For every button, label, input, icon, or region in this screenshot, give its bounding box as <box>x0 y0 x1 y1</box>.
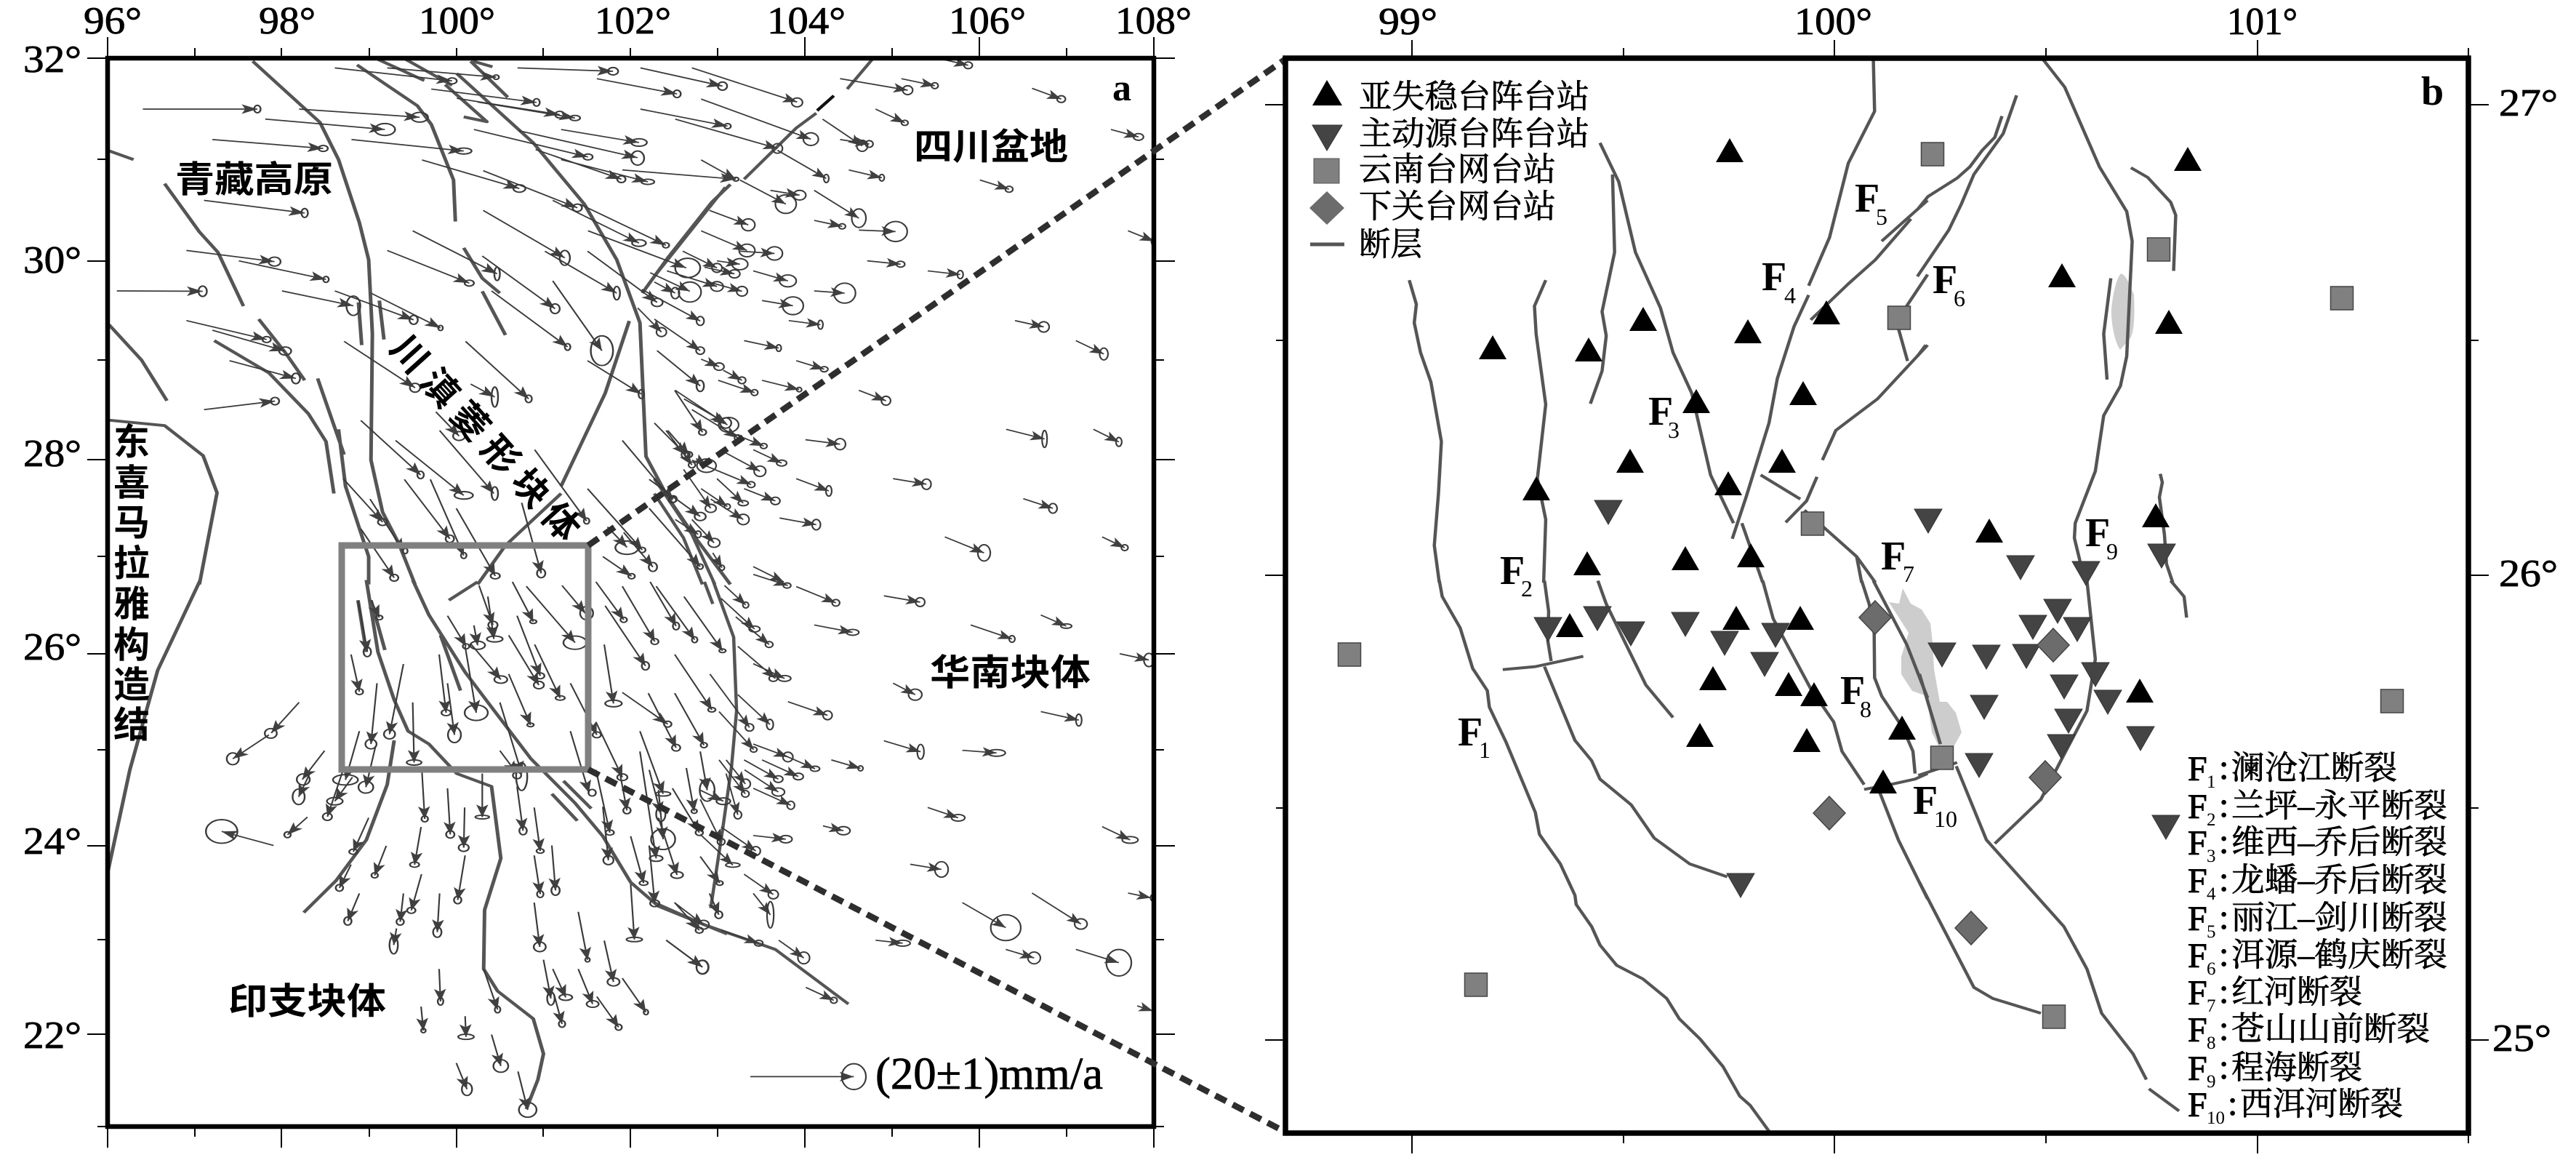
region label: Eastern Himalayan syntaxis (vertical): 造 <box>113 665 150 705</box>
Xiaguan network stations: grey diamonds <box>1813 601 2069 945</box>
region label: Indochina block: 印支块体 <box>228 981 386 1022</box>
faults north-west of panel b <box>1409 60 1927 583</box>
F5: 5 <box>2207 922 2216 942</box>
fault name labels F1 to F10 on the map: F <box>2085 511 2110 556</box>
fault name labels F1 to F10 on the map: 6 <box>1954 285 1965 311</box>
latitude labels of map b: 26° <box>2499 553 2558 595</box>
fault name labels F1 to F10 on the map: F <box>1762 255 1786 300</box>
longitude labels of map a: 98° <box>259 0 316 42</box>
region label: Sichuan Basin: 四川盆地 <box>914 127 1068 167</box>
velocity vectors north-west <box>117 68 739 581</box>
F10 <box>2188 1084 2403 1128</box>
longitude labels of map a: 106° <box>949 0 1026 42</box>
study-area box <box>342 545 588 769</box>
latitude labels of map a: 28° <box>23 433 81 475</box>
longitude labels of map a <box>84 0 1192 42</box>
longitude labels of map a: 100° <box>419 0 495 42</box>
panel b: station map <box>1265 1 2558 1153</box>
fault name labels F1 to F10 on the map: F <box>1855 176 1879 221</box>
F10: 西洱河断裂 <box>2240 1086 2403 1122</box>
fault name labels F1 to F10 on the map: 1 <box>1479 737 1490 763</box>
region label: Eastern Himalayan syntaxis (vertical): 拉 <box>113 543 150 584</box>
longitude labels of map a: 102° <box>595 0 671 42</box>
fault name labels F1 to F10 on the map: 2 <box>1521 575 1533 601</box>
fault name labels F1 to F10 on the map: F <box>1500 548 1525 593</box>
F1 <box>2188 748 2397 792</box>
F10: : <box>2228 1084 2237 1123</box>
fault name labels F1 to F10 on the map: F <box>1881 534 1906 579</box>
faults north-east of panel b <box>1917 60 2175 583</box>
F7: 7 <box>2207 996 2216 1016</box>
F10: F <box>2188 1086 2207 1124</box>
region label: Tibetan Plateau: 青藏高原 <box>175 159 333 200</box>
F6: : <box>2219 935 2228 974</box>
F9: : <box>2219 1048 2228 1087</box>
legend text: 亚失稳台阵台站 <box>1359 79 1589 115</box>
fault name labels F1 to F10 on the map: 7 <box>1903 561 1914 587</box>
fault name labels F1 to F10 on the map: 5 <box>1876 204 1887 230</box>
F7: F <box>2188 974 2207 1012</box>
legend symbol: Yunnan network station <box>1314 159 1339 183</box>
latitude labels of map a: 24° <box>23 820 81 863</box>
faults south-west <box>108 580 727 1109</box>
array stations: upward black triangles <box>1479 138 2202 793</box>
F1: F <box>2188 750 2207 788</box>
Yunnan network stations: grey squares <box>1338 143 2404 1028</box>
F5: : <box>2219 898 2228 937</box>
scale vector: 20 mm/a <box>750 1064 866 1089</box>
F1: 澜沧江断裂 <box>2231 750 2397 786</box>
F4 <box>2188 860 2447 904</box>
region label: Eastern Himalayan syntaxis (vertical): 结 <box>113 705 150 745</box>
F6: 6 <box>2207 959 2216 979</box>
region label: Eastern Himalayan syntaxis (vertical) <box>113 422 150 745</box>
F3: 维西–乔后断裂 <box>2231 824 2447 860</box>
F4: 龙蟠–乔后断裂 <box>2231 862 2447 898</box>
F7 <box>2188 972 2362 1016</box>
faults north-east <box>654 60 872 585</box>
panel a: GPS velocity map <box>23 0 1192 1148</box>
longitude labels of map a: 104° <box>767 0 846 42</box>
F5: F <box>2188 900 2207 938</box>
legend text: 云南台网台站 <box>1359 151 1556 188</box>
faults and velocity vectors, panel a <box>108 60 1157 1117</box>
F3: F <box>2188 824 2207 863</box>
latitude labels of map a: 32° <box>23 39 81 81</box>
F8: : <box>2219 1009 2228 1048</box>
fault name labels F1 to F10 on the map: F <box>1648 389 1673 434</box>
longitude labels of map b <box>1379 1 2298 43</box>
longitude labels of map b: 101° <box>2227 1 2298 43</box>
fault name key <box>2188 748 2447 1128</box>
legend symbol: array station <box>1312 80 1342 105</box>
region label: Eastern Himalayan syntaxis (vertical): 构 <box>113 625 150 665</box>
F8: 苍山山前断裂 <box>2231 1011 2430 1047</box>
latitude labels of map a <box>23 39 81 1057</box>
velocity vectors south-east <box>666 575 1157 1011</box>
fault name labels F1 to F10 on the map: 10 <box>1934 806 1957 832</box>
longitude labels of map b: 100° <box>1794 1 1872 43</box>
axis ticks of map b <box>1265 40 2489 1153</box>
fault name labels F1 to F10 on the map <box>1458 176 2118 832</box>
scale label: (20±1)mm/a <box>875 1049 1103 1099</box>
F2: 兰坪–永平断裂 <box>2231 788 2447 824</box>
F4: 4 <box>2207 884 2216 904</box>
F6: 洱源–鹤庆断裂 <box>2231 937 2447 973</box>
F2: F <box>2188 788 2207 826</box>
fault name labels F1 to F10 on the map: 3 <box>1668 417 1680 443</box>
F5 <box>2188 898 2447 942</box>
legend symbol: active-source station <box>1312 125 1342 151</box>
longitude labels of map b: 99° <box>1379 1 1437 43</box>
fault name labels F1 to F10 on the map: 8 <box>1860 696 1871 722</box>
dashed connector lines from box to panel b <box>588 60 1285 1132</box>
F7: : <box>2219 972 2228 1011</box>
faults south-west of panel b <box>1440 580 1927 1131</box>
F10: 10 <box>2207 1108 2225 1128</box>
panel letter a: a <box>1112 68 1131 109</box>
faults south-east of panel b <box>1918 580 2186 1111</box>
F4: F <box>2188 862 2207 900</box>
frame of map a <box>108 58 1154 1127</box>
fault name labels F1 to F10 on the map: F <box>1840 668 1865 713</box>
fault name labels F1 to F10 on the map: F <box>1933 257 1957 303</box>
F7: 红河断裂 <box>2231 974 2362 1010</box>
F8: 8 <box>2207 1033 2216 1053</box>
latitude labels of map b: 27° <box>2499 82 2558 124</box>
F1: 1 <box>2207 772 2216 792</box>
fault name labels F1 to F10 on the map: F <box>1913 778 1938 823</box>
F1: : <box>2219 748 2228 787</box>
frame of map b <box>1285 58 2468 1133</box>
fault name labels F1 to F10 on the map: 9 <box>2106 538 2118 564</box>
legend text: 主动源台阵台站 <box>1359 116 1589 152</box>
legend symbol: fault <box>1310 243 1344 246</box>
region label: Eastern Himalayan syntaxis (vertical): 雅 <box>113 584 150 625</box>
F3: : <box>2219 823 2228 861</box>
longitude labels of map a: 108° <box>1115 0 1192 42</box>
F9: F <box>2188 1049 2207 1088</box>
F3 <box>2188 823 2447 866</box>
region label: South China block: 华南块体 <box>930 652 1091 693</box>
region label: Eastern Himalayan syntaxis (vertical): 喜 <box>113 463 150 503</box>
F8: F <box>2188 1011 2207 1049</box>
fault name labels F1 to F10 on the map: 4 <box>1784 282 1796 308</box>
panel letter b: b <box>2421 69 2444 114</box>
F6 <box>2188 935 2447 979</box>
latitude labels of map a: 26° <box>23 626 81 668</box>
F4: : <box>2219 860 2228 899</box>
F3: 3 <box>2207 847 2216 866</box>
F8 <box>2188 1009 2430 1053</box>
faults north-west <box>108 60 731 585</box>
legend text: 断层 <box>1359 226 1422 263</box>
F2 <box>2188 786 2447 830</box>
region label: Eastern Himalayan syntaxis (vertical): 马 <box>113 503 150 543</box>
longitude labels of map a: 96° <box>84 0 142 42</box>
latitude labels of map a: 30° <box>23 239 81 281</box>
F9: 程海断裂 <box>2231 1049 2362 1086</box>
latitude labels of map b: 25° <box>2492 1017 2551 1060</box>
latitude labels of map b <box>2492 82 2558 1060</box>
legend symbol: Xiaguan network station <box>1309 191 1344 225</box>
lake and basin shading <box>1889 273 2134 747</box>
faults south-east <box>654 580 848 1004</box>
F9: 9 <box>2207 1072 2216 1092</box>
velocity vectors south-west <box>206 582 731 1117</box>
station legend <box>1309 79 1589 263</box>
F6: F <box>2188 937 2207 975</box>
velocity vectors north-east <box>638 60 1157 582</box>
F2: 2 <box>2207 810 2216 830</box>
F9 <box>2188 1048 2362 1092</box>
latitude labels of map a: 22° <box>23 1015 81 1057</box>
region label: Eastern Himalayan syntaxis (vertical): 东 <box>113 422 150 463</box>
F5: 丽江–剑川断裂 <box>2231 900 2447 936</box>
legend text: 下关台网台站 <box>1359 188 1556 225</box>
legend text <box>1359 79 1589 263</box>
fault name labels F1 to F10 on the map: F <box>1458 710 1482 755</box>
region label: Sichuan-Yunnan rhombic block: 川滇菱形块体 <box>382 327 588 549</box>
axis ticks of map a <box>87 37 1175 1148</box>
F2: : <box>2219 786 2228 825</box>
active-source stations: downward dark triangles <box>1534 500 2180 897</box>
